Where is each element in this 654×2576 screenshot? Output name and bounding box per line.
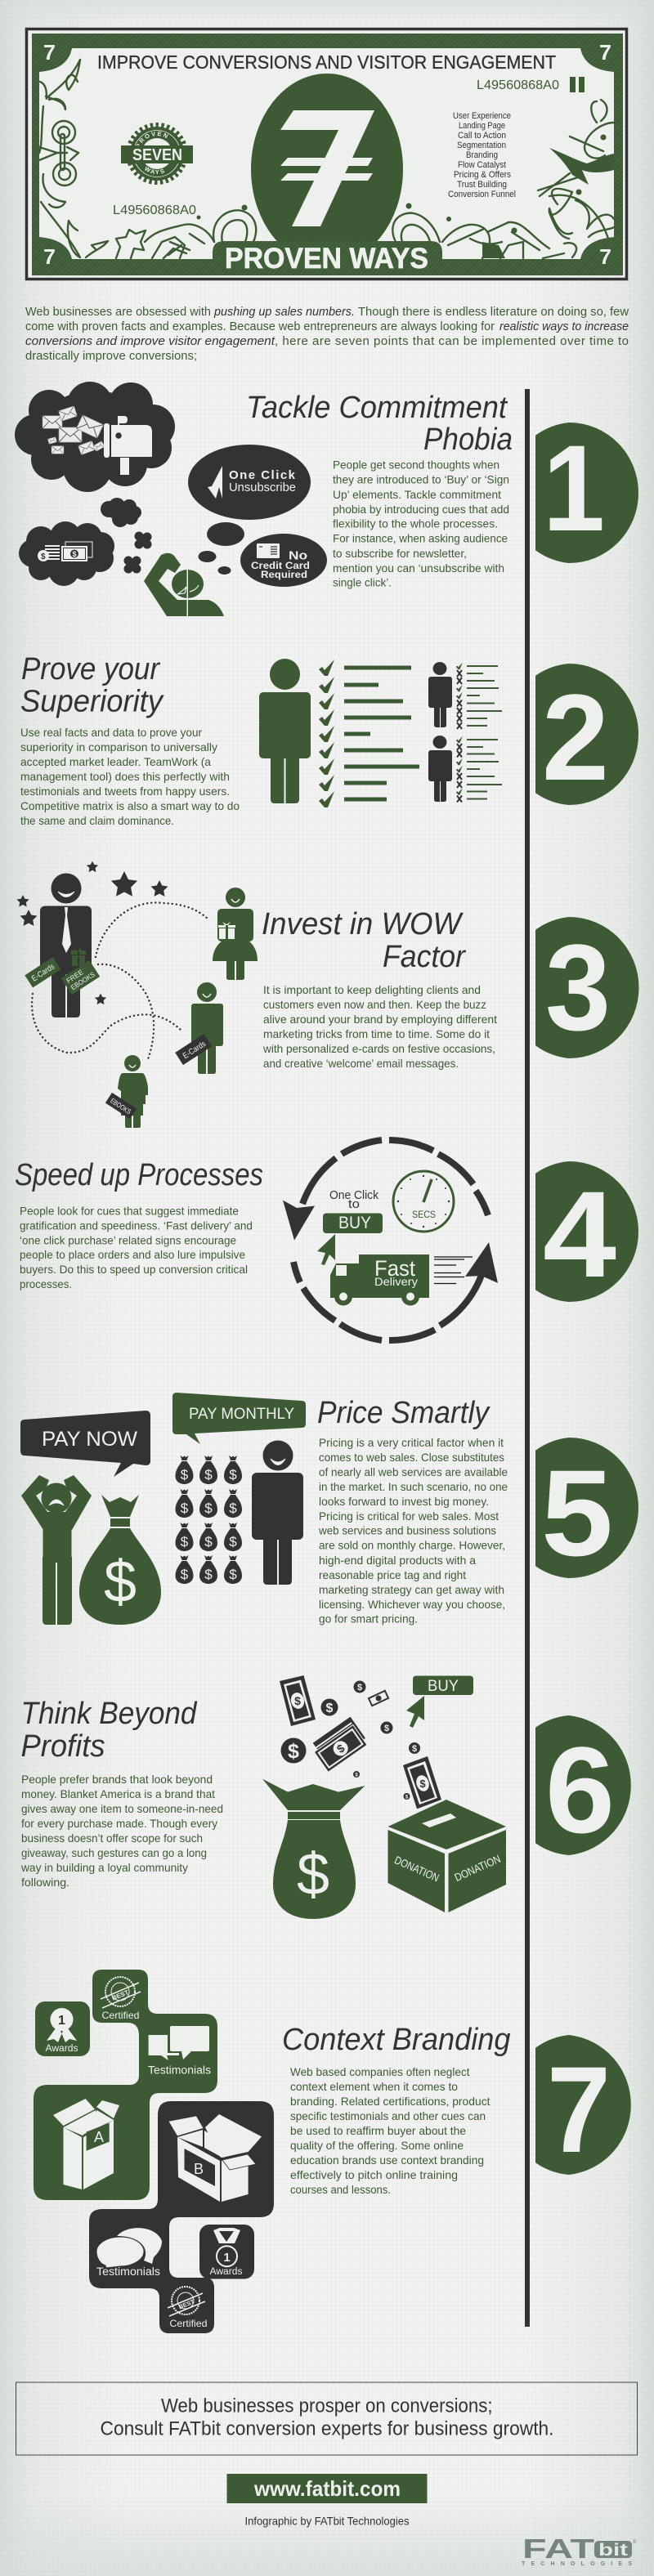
icon: delivery truck: Fast [374,1256,415,1281]
number 1: 1 [543,419,605,557]
thought bubbles [198,522,244,575]
stamp: best certified [101,1977,141,2021]
body text: For instance, when asking audience [333,531,508,544]
body text: of nearly all web services are available [319,1465,508,1478]
heading: Prove your [21,652,160,686]
awards tile green [35,2001,90,2056]
body text: reasonable price tag and right [319,1568,466,1581]
figure: person with card [175,982,223,1074]
heading: Tackle Commitment [246,391,508,425]
body text [290,2065,490,2196]
body text: single click’. [333,575,392,588]
dotted connection lines [32,902,208,1059]
body text: education brands use context branding [290,2153,484,2167]
seven seal badge: WAYS [145,166,164,174]
body text: ‘one click purchase’ related signs encourage [20,1234,236,1247]
card: e-cards [25,957,61,987]
body text [262,983,497,1070]
number 6: 6 [545,1721,615,1858]
body text: buyers. Do this to speed up conversion critical [20,1263,248,1276]
icon: banknote stack: $ [334,1742,347,1755]
icon: delivery truck [330,1254,473,1306]
bubble: no credit card [240,534,327,587]
body text: the same and claim dominance. [20,814,174,827]
serial number bottom: L49560868A0 [113,203,196,217]
body text: high-end digital products with a [319,1554,476,1567]
website button: www.fatbit.com [253,2476,401,2501]
fatbit logo: FAT [522,2534,594,2564]
body text: and creative ‘welcome’ email messages. [263,1057,459,1070]
icon: leader person [259,659,311,803]
icon: banknote stack [310,1717,369,1772]
number 4 [535,1161,638,1303]
card: e-cards: E-Cards [30,963,56,984]
icon: floating banknote [280,1675,316,1726]
topic list: Segmentation [457,141,506,150]
body text: mention you can ‘unsubscribe with [333,561,504,575]
corner sevens [43,40,611,269]
stars [16,861,168,1004]
body text: Web based companies often neglect [290,2065,470,2078]
body text: gives away one item to someone-in-need [21,1802,223,1815]
icon: thought puffs [124,531,152,574]
awards tile dark: Awards [209,2267,243,2277]
section 1: tackle commitment phobia [15,382,513,616]
body text: looks forward to invest big money. [319,1495,489,1508]
bubble: no credit card: No [289,549,307,562]
figure: woman with gift [213,888,258,980]
body text: marketing tricks from time to time. Some do it [263,1027,490,1040]
icon: big money bag [79,1495,161,1625]
intro paragraph [25,305,629,363]
icon: banknote entering box: $ [419,1778,426,1790]
icon: twelve small money bags: $ [181,1534,189,1550]
icon: money bag [262,1779,365,1919]
seven seal badge: SEVEN [132,146,182,164]
icon: donation box: DONATION [392,1854,441,1885]
topic list: Branding [466,150,498,160]
body text: comes to web sales. Close substitutes [319,1451,504,1464]
body text [20,726,240,827]
intro paragraph: Though there is endless literature on doing so, few [358,305,629,319]
intro paragraph: pushing up sales numbers. [213,305,355,319]
icon: twelve small money bags: $ [229,1567,237,1582]
card: free ebooks [61,960,100,995]
topic list: Landing Page [459,121,505,131]
corner sevens: 7 [599,40,611,65]
icon: competitor person B [428,736,452,802]
bubble: one click unsubscribe: Unsubscribe [229,481,296,494]
heading: Superiority [20,685,164,719]
topic list: Conversion Funnel [448,190,516,199]
seven seal badge: PROVEN [136,131,168,145]
section 3: invest in wow factor [16,861,497,1128]
body text: People look for cues that suggest immediate [20,1205,239,1218]
figure: businessman [40,873,92,1017]
card: free ebooks: EBOOKS [69,970,96,991]
stamp: best certified: BEST [177,2297,196,2310]
intro paragraph: Web businesses are obsessed with [25,305,211,319]
icon: clock [393,1171,454,1232]
body text: context element when it comes to [290,2080,458,2093]
website button [227,2474,427,2503]
number 3 [535,917,638,1058]
heading [246,391,513,457]
body text: people to place orders and also lure impulsive [20,1248,245,1261]
icon: twelve small money bags: $ [204,1467,213,1483]
figure: person with ebooks [105,1055,148,1128]
bubble: one click unsubscribe: One Click [229,468,296,482]
fatbit logo: TECHNOLOGIES [522,2561,632,2567]
body text [333,458,509,588]
body text: following. [21,1876,69,1889]
topic list [448,111,516,199]
heading: Phobia [423,423,513,457]
intro paragraph: realistic ways to increase [499,320,629,333]
section 7: context branding [34,1970,510,2333]
proven ways tab: PROVEN WAYS [225,243,428,275]
section 5: price smartly [20,1393,508,1625]
body text [20,1773,223,1889]
icon: box b: B [194,2161,204,2177]
bubble: one click unsubscribe [188,445,311,520]
body text [20,1205,253,1290]
corner sevens: 7 [43,40,56,65]
number 4: 4 [543,1165,616,1303]
banknote heading: IMPROVE CONVERSIONS AND VISITOR ENGAGEMENT [97,51,556,73]
body text: Use real facts and data to prove your [20,726,202,739]
seven seal badge [121,123,193,185]
heading: Factor [383,940,466,974]
icon: twelve small money bags: $ [204,1500,213,1516]
number 5: 5 [541,1444,613,1581]
icon: twelve small money bags [175,1456,242,1584]
fatbit logo: bit [598,2541,628,2560]
topic list: Flow Catalyst [458,160,506,170]
number 1 [535,419,638,563]
icon: coins [281,1680,420,1800]
topic list: Trust Building [457,180,507,190]
stamp: best certified [168,2287,208,2329]
number 6 [535,1715,631,1858]
icon: big money bag: $ [104,1550,137,1615]
body text: money. Blanket America is a brand that [21,1787,215,1800]
hero banknote [25,28,628,281]
body text: quality of the offering. Some online [290,2139,464,2152]
body text: to subscribe for newsletter, [333,547,467,560]
section 6: think beyond profits [20,1675,506,1919]
credit line: Infographic by FATbit Technologies [245,2514,409,2527]
body text: Pricing is a very critical factor when it [319,1436,504,1449]
icon: coins: $ [384,1724,389,1733]
stamp: best certified: BEST [111,1988,130,2002]
label: one click to: One Click [329,1188,379,1202]
awards tile dark [199,2225,254,2279]
body text: giveaway, such gestures can go a long [21,1846,207,1859]
body text: testimonials and tweets from happy users. [20,785,230,798]
closing call-out box [16,2382,638,2455]
icon: donation box: DONATION [453,1853,503,1884]
heading: Invest in WOW [262,907,464,941]
body text: with personalized e-cards on festive occasions, [262,1042,495,1055]
body text: processes. [20,1277,72,1290]
banknote green border [32,34,623,275]
body text: for every purchase made. Though every [21,1817,217,1830]
bubble: no credit card: Required [261,569,307,580]
intro paragraph: come with proven facts and examples. Because web entrepreneurs are always looking for [25,320,495,333]
icon: twelve small money bags: $ [229,1500,237,1516]
body text: business doesn’t offer scope for such [21,1831,203,1845]
fatbit logo [522,2534,637,2567]
figure: person with ebooks: EBOOKS [109,1097,132,1116]
button: buy [323,1213,383,1233]
icon: box a: A [94,2129,104,2145]
topic list: Pricing & Offers [454,170,511,180]
body text: Competitive matrix is also a smart way to do [20,799,240,812]
speech bubble: pay now [20,1411,150,1477]
topic list: User Experience [453,111,511,121]
label: one click to: to [348,1197,360,1211]
green brand tiles [34,1970,217,2200]
awards tile green: Awards [46,2044,78,2054]
icon: floating banknote: $ [294,1694,301,1707]
closing call-out box: Consult FATbit conversion experts for business growth. [100,2417,554,2440]
awards tile green: 1 [58,2014,65,2028]
body text: be used to reaffirm buyer about the [290,2124,466,2137]
awards tile dark: 1 [223,2251,231,2265]
number 5 [535,1438,638,1581]
body text: People get second thoughts when [333,458,499,471]
icon: twelve small money bags: $ [229,1467,237,1483]
icon: donation box [387,1800,506,1912]
body text: alive around your brand by employing different [263,1013,497,1026]
heading: Profits [21,1729,105,1764]
icon: money cloud: $ [41,552,46,561]
intro paragraph: , here are seven points that can be implemented over time to [275,334,629,348]
body text: customers even now and then. Keep the buzz [263,998,486,1011]
body text: gratification and speediness. ‘Fast delivery’ and [20,1219,253,1232]
section 4: speed up processes [15,1140,498,1340]
icon: money bag: $ [297,1842,329,1907]
icon: mail cloud [15,382,175,492]
heading [262,907,466,974]
body text: Up’ elements. Tackle commitment [333,488,501,501]
icon: money cloud [19,521,114,586]
icon: circular arrows [283,1140,498,1340]
intro paragraph: conversions and improve visitor engagement [25,334,275,348]
checklist: competitor A [456,663,502,729]
body text: specific testimonials and other cues can [290,2109,486,2122]
banknote frame [26,29,626,280]
button: buy: BUY [338,1214,371,1232]
pause bars [570,77,585,92]
body text: in the market. In such scenario, no one [319,1480,508,1493]
section 2: prove your superiority [20,652,502,827]
label: one click to [329,1188,379,1211]
icon: box a [53,2099,119,2189]
button: buy: BUY [428,1678,459,1695]
dark brand tiles [89,2101,274,2333]
icon: coins: $ [288,1740,299,1763]
body text: web services and business solutions [318,1523,496,1536]
icon: twelve small money bags: $ [181,1567,189,1582]
bubble: no credit card: Credit Card [251,560,310,571]
icon: speech bubbles [148,2026,211,2076]
heading: Price Smartly [317,1396,490,1430]
icon: banknote entering box [403,1756,441,1809]
central oval with seven [251,74,403,265]
number 7: 7 [547,2041,611,2178]
icon: oval speech bubbles: Testimonials [96,2265,160,2278]
number 2: 2 [542,669,609,806]
icon: cursor [406,1696,424,1728]
icon: coins: $ [405,1795,409,1800]
corner sevens: 7 [43,244,56,269]
intro paragraph: drastically improve conversions; [25,349,197,363]
icon: coins: $ [326,1702,334,1715]
icon: cursor [317,1234,335,1265]
icon: box b [169,2114,262,2202]
body text: management tool) does this perfectly with [20,770,230,783]
icon: twelve small money bags: $ [181,1467,189,1483]
body text: marketing strategy can get away with [319,1583,504,1596]
body text: way in building a loyal community [20,1861,188,1874]
card: free ebooks: FREE [65,968,85,985]
body text: courses and lessons. [290,2183,391,2196]
banknote ornaments [39,60,614,258]
body text: flexibility to the whole processes. [333,517,498,530]
heading: Speed up Processes [15,1158,263,1192]
fatbit logo: ® [633,2539,637,2545]
body text: they are introduced to ‘Buy’ or ‘Sign [333,472,509,485]
corner sevens: 7 [599,244,611,269]
heading [21,1697,198,1764]
icon: twelve small money bags: $ [229,1534,237,1550]
body text: Pricing is critical for web sales. Most [319,1509,499,1523]
body text: branding. Related certifications, product [290,2095,490,2108]
number 2 [535,664,638,806]
speech bubble: pay now: PAY NOW [42,1428,137,1451]
icon: money cloud: $ [72,550,77,558]
icon: coins: $ [412,1744,417,1754]
body text: effectively to pitch online training [290,2168,458,2181]
body text [318,1436,508,1625]
body text: licensing. Whichever way you choose, [319,1598,505,1611]
body text: go for smart pricing. [319,1612,418,1625]
icon: coins: $ [357,1683,362,1693]
body text: phobia by introducing cues that add [333,503,509,516]
icon: clock: SECS [412,1210,436,1220]
icon: speech bubbles: Testimonials [148,2064,211,2076]
number 7 [535,2035,631,2178]
heading: Context Branding [282,2023,510,2057]
figure: person with card: E-Cards [181,1040,208,1061]
serial number top: L49560868A0 [477,78,559,92]
icon: twelve small money bags: $ [204,1567,213,1582]
icon: delivery truck: Delivery [374,1275,418,1288]
stamp: best certified: Certified [101,2010,139,2021]
icon: small banknote [368,1689,389,1707]
topic list: Call to Action [458,131,506,141]
heading [20,652,164,719]
checklist: competitor B [456,736,502,803]
body text: accepted market leader. TeamWork (a [20,755,211,768]
stamp: best certified: Certified [170,2318,208,2329]
body text: superiority in comparison to universally [20,740,217,754]
icon: thought cloud small [101,498,141,527]
vertical timeline bar [525,389,530,2327]
icon: thinking person [144,553,224,616]
closing call-out box: Web businesses prosper on conversions; [161,2395,492,2417]
number 3: 3 [545,919,611,1056]
icon: twelve small money bags: $ [181,1500,189,1516]
icon: stressed person [21,1475,92,1625]
icon: happy person [252,1440,303,1585]
icon: competitor person A [428,662,452,727]
button: buy [413,1675,473,1695]
icon: oval speech bubbles [96,2228,162,2278]
body text: are sold on monthly charge. However, [319,1538,505,1551]
heading: Think Beyond [21,1697,198,1731]
icon: coins: $ [355,1773,358,1778]
body text: It is important to keep delighting clients and [263,983,481,996]
body text: People prefer brands that look beyond [21,1773,213,1786]
checklist: leader [319,660,419,807]
icon: twelve small money bags: $ [204,1534,213,1550]
speech bubble: pay monthly: PAY MONTHLY [189,1406,294,1423]
speech bubble: pay monthly [172,1393,306,1444]
